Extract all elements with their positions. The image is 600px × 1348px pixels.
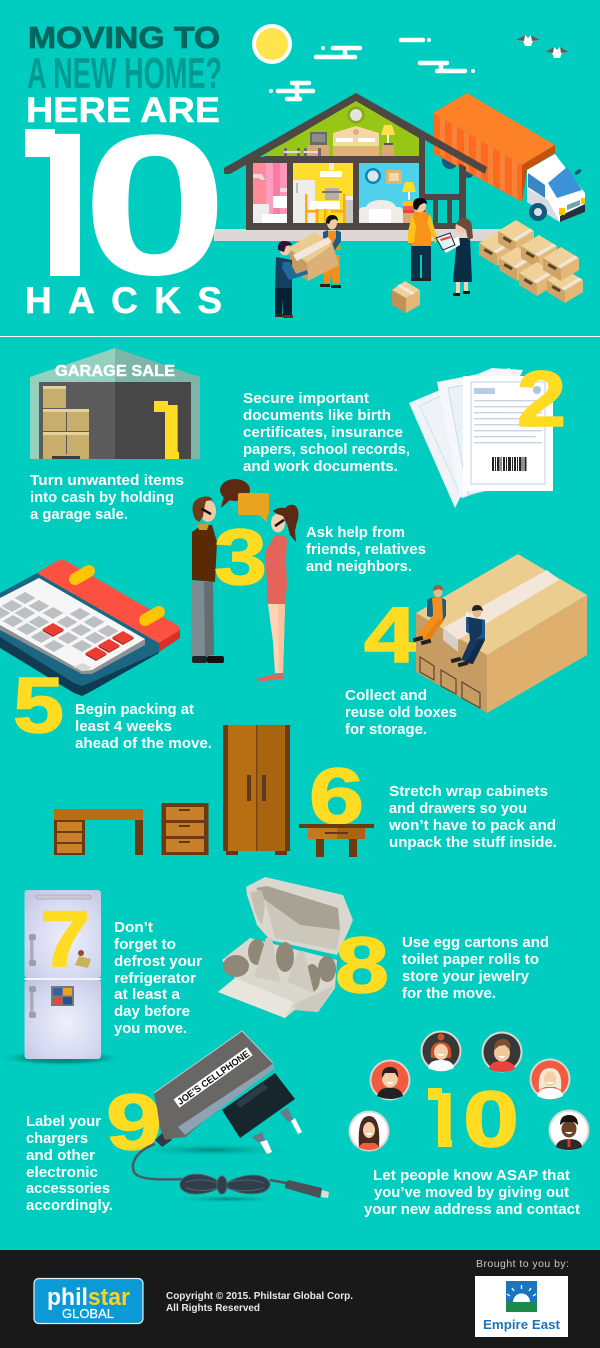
panel: hack 10 contacts: [348, 1030, 590, 1218]
panel: hack 1 garage sale: [30, 348, 200, 523]
number 10: [428, 1088, 516, 1148]
number 8: 8: [335, 920, 389, 1009]
panel: hack 7 fridge: at least a: [114, 986, 181, 1003]
panel: hack 9 charger: and other: [26, 1147, 95, 1164]
number 7: 7: [40, 894, 90, 983]
sign: GARAGE SALE: [55, 363, 175, 380]
panel: hack 6 furniture: won’t have to pack and: [388, 817, 556, 834]
pink bathroom: [253, 163, 287, 223]
man: [191, 581, 214, 657]
icon: house cutaway: [224, 93, 487, 230]
text: Ask help from: [306, 524, 405, 541]
number 2: 2: [517, 354, 566, 443]
cable coil: [180, 1174, 270, 1194]
panel: hack 8 egg carton: toilet paper rolls to: [402, 951, 539, 968]
panel: hack 6 furniture: [54, 725, 557, 857]
panel: hack 10 contacts: you’ve moved by giving out: [374, 1184, 569, 1201]
panel: hack 2 documents: [243, 354, 566, 508]
fridge shadow: [0, 1050, 126, 1066]
panel: hack 7 fridge: [0, 890, 202, 1066]
philstar logo: GLOBAL: [62, 1307, 114, 1321]
number 5: 5: [13, 660, 64, 749]
text: Use egg cartons and: [402, 934, 549, 951]
panel: hack 9 charger: accordingly.: [26, 1197, 113, 1214]
number 4: 4: [364, 590, 417, 679]
title block: [25, 26, 221, 314]
avatar 1: [370, 1060, 410, 1100]
stack of boxes: [479, 220, 583, 303]
number 1: [154, 401, 179, 459]
text: Let people know ASAP that: [373, 1167, 570, 1184]
red top: [37, 560, 180, 643]
number 9: 9: [106, 1077, 162, 1166]
panel: hack 7 fridge: refrigerator: [114, 970, 196, 987]
people: client and agent: [408, 198, 473, 296]
sponsor caption: Brought to you by:: [476, 1258, 569, 1270]
paper middle: [437, 368, 530, 497]
page shadow: [0, 603, 145, 674]
blue living room: [359, 163, 419, 223]
panel: hack 2 documents: and work documents.: [243, 458, 398, 475]
panel: hack 10 contacts: your new address and contact: [364, 1201, 580, 1218]
plug head: [222, 1073, 295, 1138]
wardrobe: [223, 725, 290, 855]
panel: hack 6 furniture: unpack the stuff inside.: [389, 834, 557, 851]
woman with clipboard: [453, 238, 472, 282]
panel: hack 3 ask help: [191, 479, 426, 681]
empire east logo: Empire East: [483, 1318, 561, 1332]
title line: hacks: HACKS: [25, 280, 222, 321]
text: Begin packing at: [75, 701, 194, 718]
panel: hack 2 documents: certificates, insurance: [243, 424, 403, 441]
desk: [54, 809, 143, 855]
box carried: [288, 232, 333, 263]
charger body: [154, 1031, 273, 1140]
title number 10: [25, 129, 218, 276]
panel: hack 7 fridge: you move.: [114, 1020, 187, 1037]
calendar base blue: [0, 573, 159, 686]
philstar logo: [34, 1278, 143, 1324]
sticky note: [75, 956, 91, 968]
number 6: 6: [309, 751, 364, 840]
people: two movers with box: [275, 215, 341, 318]
ground slab: [214, 229, 501, 241]
dresser: [162, 803, 208, 855]
copyright: Copyright © 2015. Philstar Global Corp.: [166, 1291, 353, 1302]
panel: hack 4 boxes: reuse old boxes: [345, 704, 457, 721]
text: Turn unwanted items: [30, 472, 184, 489]
text: Secure important: [243, 390, 369, 407]
garage building: [30, 348, 115, 459]
cable: [133, 1144, 182, 1179]
avatar 5: [348, 1110, 390, 1152]
app magnets: [51, 986, 74, 1006]
panel: hack 8 egg carton: for the move.: [402, 985, 496, 1002]
walls: [246, 157, 425, 230]
usb plug: [285, 1180, 322, 1198]
title number 10: 0: [82, 94, 228, 317]
footer: [0, 1250, 600, 1348]
cab: [527, 154, 585, 222]
number 10: 0: [463, 1074, 519, 1163]
panel: hack 7 fridge: defrost your: [114, 953, 202, 970]
binder tabs: [67, 563, 97, 587]
box on ground: [392, 281, 420, 313]
carton lid: [246, 877, 353, 955]
panel: hack 4 boxes: [345, 554, 587, 738]
panel: hack 5 calendar: ahead of the move.: [75, 735, 212, 752]
fridge body: [24, 890, 101, 978]
copyright: [166, 1291, 353, 1314]
icon: birds: [516, 35, 569, 58]
yellow kitchen: [293, 163, 353, 223]
panel: hack 4 boxes: for storage.: [345, 721, 427, 738]
panel: hack 1 garage sale: into cash by holding: [30, 489, 174, 506]
panel: hack 9 charger: accessories: [26, 1180, 110, 1197]
speech bubbles: [220, 479, 250, 501]
container: [433, 93, 555, 165]
calendar cells: [14, 592, 36, 604]
copyright: All Rights Reserved: [166, 1303, 260, 1314]
panel: hack 2 documents: papers, school records,: [243, 441, 410, 458]
carton tray: [218, 938, 337, 1018]
number 10: 1: [419, 1078, 464, 1167]
man in orange shirt: [411, 246, 431, 278]
attic: [256, 93, 425, 162]
panel: hack 3 ask help: and neighbors.: [306, 558, 412, 575]
page: [0, 578, 145, 671]
panel: hack 5 calendar: least 4 weeks: [75, 718, 172, 735]
workers on box: [427, 597, 433, 618]
charger strain relief: [155, 1132, 172, 1147]
panel: hack 1 garage sale: a garage sale.: [30, 506, 128, 523]
panel: hack 9 charger: chargers: [26, 1130, 88, 1147]
icon: sun: [252, 24, 292, 64]
icon: clouds: [269, 38, 475, 99]
title number 10: 1: [2, 96, 113, 319]
icon: truck: [433, 93, 585, 222]
paper front: [463, 376, 553, 491]
avatar 4: [530, 1058, 570, 1100]
text: Don’t: [114, 919, 153, 936]
panel: hack 3 ask help: friends, relatives: [306, 541, 426, 558]
title line: moving to: MOVING TO: [28, 20, 220, 55]
calendar base dark: [0, 630, 159, 696]
panel: hack 7 fridge: forget to: [114, 936, 176, 953]
panel: hack 8 egg carton: [218, 877, 549, 1018]
paper back: [409, 368, 523, 508]
avatar 6: [548, 1110, 590, 1150]
avatar 3: [482, 1032, 522, 1072]
rear wheels: [442, 153, 458, 169]
panel: hack 2 documents: documents like birth: [243, 407, 391, 424]
charger label: JOE'S CELLPHONE: [176, 1049, 252, 1108]
text: Label your: [26, 1113, 101, 1130]
title line: here are: HERE ARE: [26, 91, 220, 130]
handles: [30, 936, 34, 964]
attic furniture: [348, 106, 364, 124]
number 1: 1: [146, 390, 190, 479]
title line: a new home: A NEW HOME?: [27, 49, 222, 98]
shadows: [124, 1143, 300, 1157]
avatar 2: [420, 1030, 462, 1072]
mover in navy: [275, 257, 292, 288]
number 3: 3: [214, 512, 267, 601]
empire east logo: [475, 1276, 568, 1337]
side table: [299, 824, 374, 857]
panel: hack 5 calendar: [0, 560, 212, 752]
barcode: [492, 457, 526, 471]
panel: hack 9 charger: [26, 1031, 329, 1214]
stacked boxes: [43, 386, 89, 459]
panel: hack 8 egg carton: store your jewelry: [402, 968, 530, 985]
porch: [459, 163, 466, 230]
panel: hack 7 fridge: day before: [114, 1003, 190, 1020]
panel: hack 9 charger: electronic: [26, 1164, 98, 1181]
divider: [0, 336, 600, 337]
roof: [224, 93, 487, 174]
philstar logo: philstar: [47, 1284, 130, 1311]
box symbols: [420, 657, 480, 708]
text: Collect and: [345, 687, 427, 704]
text: Stretch wrap cabinets: [389, 783, 548, 800]
mover in orange: [323, 255, 340, 284]
cardboard box: [416, 554, 587, 655]
woman: [268, 604, 285, 673]
panel: hack 6 furniture: and drawers so you: [389, 800, 527, 817]
